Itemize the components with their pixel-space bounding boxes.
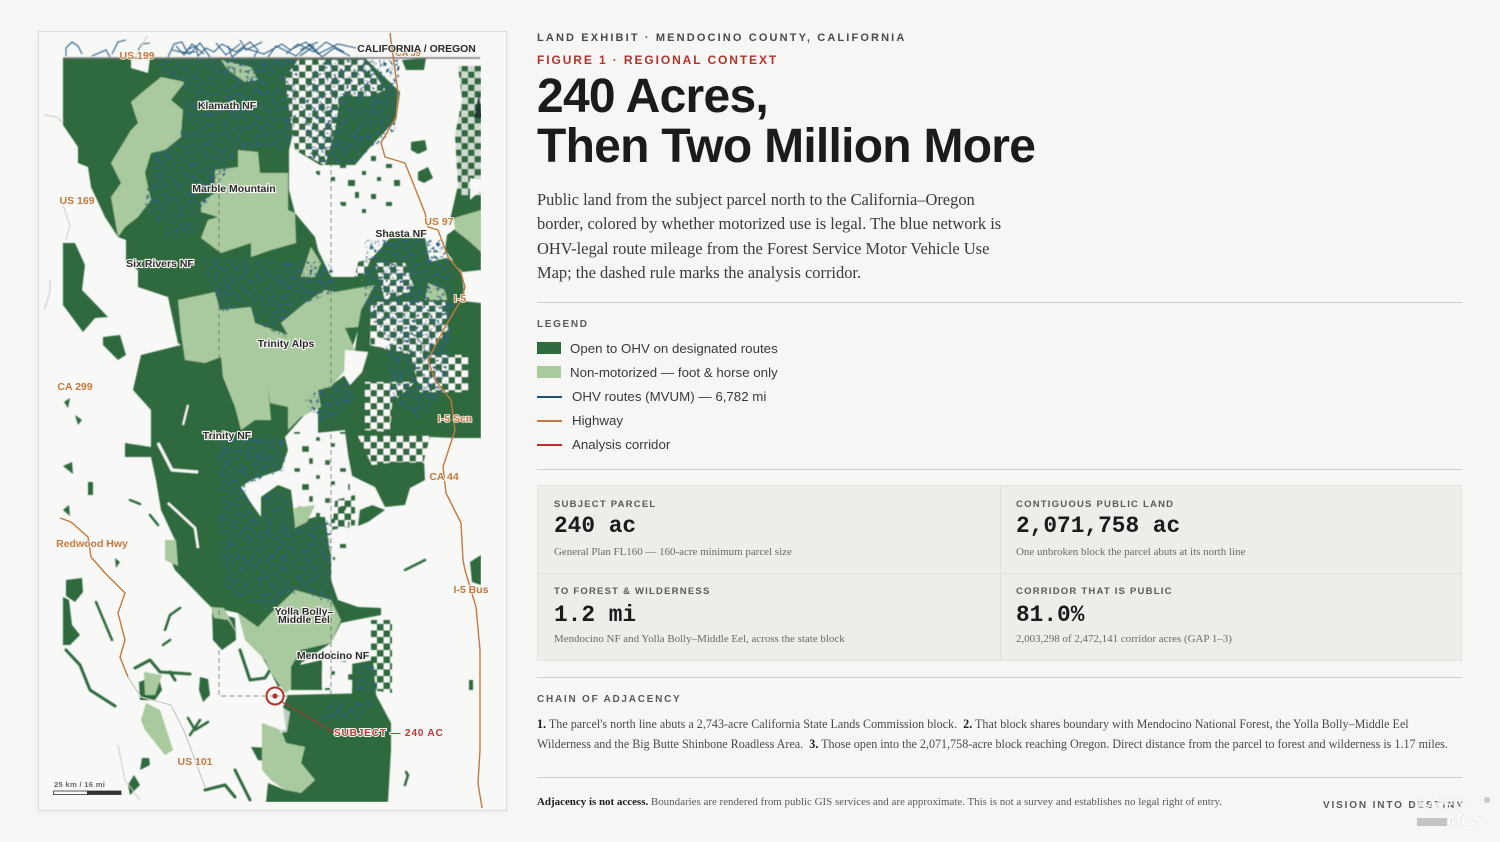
stat: contiguous public land: CONTIGUOUS PUBLIC LAND bbox=[1016, 498, 1174, 510]
highway labels: I-5 bbox=[454, 293, 466, 305]
stat: corridor public: 81.0% bbox=[1016, 602, 1084, 628]
stat: subject parcel: General Plan FL160 — 160-acre minimum parcel size bbox=[554, 546, 792, 558]
open land: southwest strips bbox=[66, 500, 425, 800]
stat: contiguous public land: One unbroken block the parcel abuts at its north line bbox=[1016, 546, 1245, 558]
border line bbox=[63, 57, 480, 59]
scale bar bbox=[54, 780, 121, 794]
open land: south block bbox=[266, 693, 391, 802]
legend heading: LEGEND bbox=[537, 319, 589, 330]
forest and wilderness labels: Trinity NF bbox=[203, 430, 252, 442]
stat: corridor public bbox=[1016, 586, 1232, 645]
title: 240 Acres, bbox=[537, 70, 768, 123]
footer note: Adjacency is not access. Boundaries are rendered from public GIS services and are approximate. This is not a survey and establishes no legal right of entry. bbox=[537, 796, 1222, 808]
intro paragraph bbox=[537, 190, 1001, 282]
intro paragraph: Map; the dashed rule marks the analysis corridor. bbox=[537, 263, 861, 282]
map bbox=[44, 32, 488, 808]
forest and wilderness labels: Klamath NF bbox=[198, 100, 257, 112]
open land: main contiguous block bbox=[63, 58, 381, 687]
highway labels: I-5 Bus bbox=[453, 584, 489, 596]
Redwood Hwy bbox=[60, 518, 128, 677]
open land: northeast columns bbox=[450, 66, 481, 220]
forest and wilderness labels: Trinity Alps bbox=[258, 338, 315, 350]
chain text: 1. The parcel's north line abuts a 2,743-acre California State Lands Commission block. 2. That block shares boundary with Mendocino National Forest, the Yolla Bolly–Middle Eel bbox=[537, 717, 1409, 731]
panel: regional map bbox=[38, 31, 507, 811]
highway labels: CA 44 bbox=[429, 471, 459, 483]
non-motorized: Yolla Bolly bbox=[238, 590, 341, 693]
north checkerboard overlay bbox=[285, 60, 385, 165]
legend: OHV routes: OHV routes (MVUM) — 6,782 mi bbox=[572, 389, 766, 404]
title: Then Two Million More bbox=[537, 120, 1035, 173]
stat: to forest: Mendocino NF and Yolla Bolly–Middle Eel, across the state block bbox=[554, 633, 845, 645]
small north arrow mark bbox=[474, 93, 482, 118]
forest and wilderness labels: Marble Mountain bbox=[192, 183, 276, 195]
forest and wilderness labels: Six Rivers NF bbox=[126, 258, 194, 270]
stat: subject parcel bbox=[554, 498, 792, 558]
chain text: Wilderness and the Big Butte Shinbone Roadless Area. 3. Those open into the 2,071,758-acre block reaching Oregon. Direct distance from the parcel to forest and wilderness is 1.17 miles. bbox=[537, 737, 1448, 751]
stat: corridor public: CORRIDOR THAT IS PUBLIC bbox=[1016, 586, 1173, 596]
non-motorized: Marble Mountain bbox=[201, 150, 296, 257]
intro paragraph: OHV-legal route mileage from the Forest Service Motor Vehicle Use bbox=[537, 238, 989, 258]
stat: subject parcel: SUBJECT PARCEL bbox=[554, 498, 656, 510]
stat: contiguous public land bbox=[1016, 498, 1245, 558]
checkerboard east overlays bbox=[370, 302, 448, 357]
scale bar: 25 km / 16 mi bbox=[54, 780, 105, 789]
forest and wilderness labels: Yolla Bolly– bbox=[275, 606, 334, 618]
stat: to forest: 1.2 mi bbox=[554, 602, 636, 628]
open land: Shasta cluster bbox=[352, 238, 465, 310]
legend: corridor: Analysis corridor bbox=[572, 437, 670, 452]
stat: subject parcel: 240 ac bbox=[554, 513, 636, 539]
blue route lines above border bbox=[66, 40, 356, 57]
highway labels: US 97 bbox=[424, 216, 454, 228]
figure label: FIGURE 1 · REGIONAL CONTEXT bbox=[537, 53, 778, 67]
title bbox=[537, 70, 1035, 173]
intro paragraph: Public land from the subject parcel north to the California–Oregon bbox=[537, 190, 975, 208]
stat: corridor public: 2,003,298 of 2,472,141 corridor acres (GAP 1–3) bbox=[1016, 633, 1232, 645]
US 101 gray road bbox=[128, 677, 205, 787]
chain text bbox=[537, 717, 1448, 751]
forest and wilderness labels: Shasta NF bbox=[375, 228, 427, 240]
highway labels: US 199 bbox=[119, 50, 155, 62]
stat grid bbox=[537, 485, 1462, 661]
watermark: MLS logo bbox=[1417, 797, 1490, 829]
highway labels: I-5 Scn bbox=[438, 413, 472, 425]
non-motorized: Klamath west wilderness bbox=[111, 60, 481, 793]
forest and wilderness labels: Middle Eel bbox=[278, 614, 330, 626]
watermark: MLS logo: BAREIS bbox=[1417, 797, 1466, 812]
corridor dashed rule bbox=[219, 58, 331, 696]
legend: non-motorized: Non-motorized — foot & horse only bbox=[570, 365, 778, 380]
highway labels: CA 299 bbox=[57, 381, 93, 393]
open land: east block bbox=[318, 291, 481, 507]
forest and wilderness labels: CALIFORNIA / OREGON bbox=[357, 44, 476, 55]
stat: contiguous public land: 2,071,758 ac bbox=[1016, 513, 1180, 539]
subject parcel marker bbox=[266, 688, 444, 739]
open land: isolated blocks bbox=[63, 58, 481, 797]
map land layers bbox=[44, 35, 505, 802]
I-5 highway bbox=[381, 33, 482, 808]
intro paragraph: border, colored by whether motorized use is legal. The blue network is bbox=[537, 214, 1001, 233]
white gaps bbox=[280, 336, 392, 733]
highway labels bbox=[56, 48, 489, 768]
highway labels: CA 39 bbox=[395, 48, 421, 58]
non-motorized: Trinity Alps bbox=[178, 285, 375, 430]
open land: north checkerboard base bbox=[285, 58, 400, 165]
stat: to forest: TO FOREST & WILDERNESS bbox=[554, 586, 711, 596]
legend: open to OHV: Open to OHV on designated routes bbox=[570, 341, 778, 356]
legend bbox=[537, 341, 778, 452]
OHV route network bbox=[145, 58, 455, 720]
scattered inholdings bbox=[315, 155, 401, 214]
faint background roads bbox=[44, 36, 148, 800]
subject parcel marker: SUBJECT — 240 AC bbox=[334, 728, 444, 739]
highway labels: US 101 bbox=[177, 756, 213, 768]
highways bbox=[60, 33, 482, 808]
eyebrow: LAND EXHIBIT · MENDOCINO COUNTY, CALIFORNIA bbox=[537, 32, 906, 44]
highway labels: US 169 bbox=[59, 195, 95, 207]
stat: to forest bbox=[554, 586, 845, 645]
watermark: MLS logo: MLS bbox=[1447, 810, 1483, 829]
legend: highway: Highway bbox=[572, 413, 623, 428]
brand line: VISION INTO DESTINY bbox=[1323, 800, 1465, 811]
chain heading: CHAIN OF ADJACENCY bbox=[537, 694, 681, 705]
forest and wilderness labels bbox=[126, 44, 476, 662]
highway labels: Redwood Hwy bbox=[56, 538, 128, 550]
forest and wilderness labels: Mendocino NF bbox=[297, 650, 370, 662]
